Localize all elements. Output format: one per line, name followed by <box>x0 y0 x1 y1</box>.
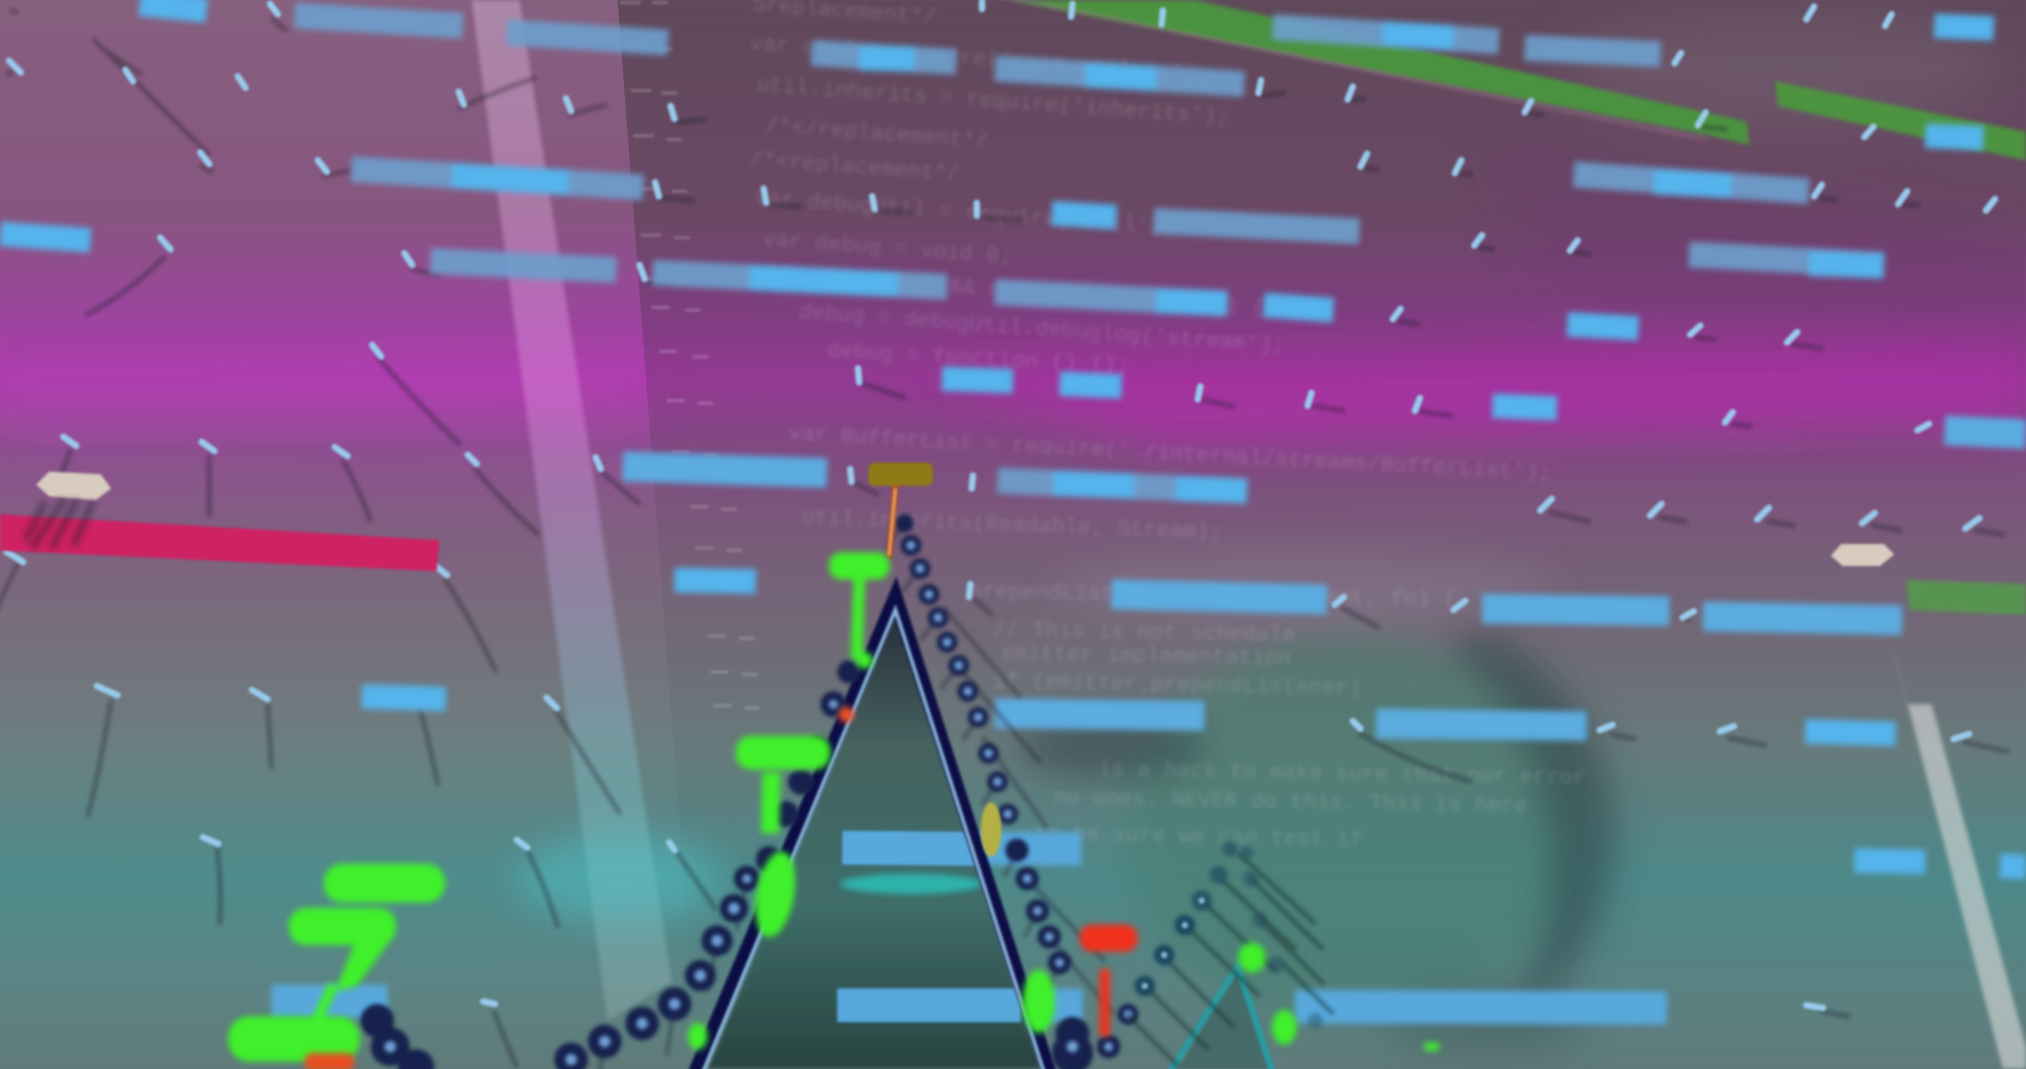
code text: is a hack to make sure that our error <box>1098 757 1586 791</box>
red dot <box>839 707 854 722</box>
code text: if (debugUtil && debugUtil.debuglog) { <box>764 261 1266 321</box>
marker shadows <box>26 499 93 548</box>
main triangle <box>695 597 1049 1069</box>
red stem <box>1101 969 1109 1036</box>
navy beads <box>360 514 1138 1069</box>
code text: if (emitter.prependListener) <box>992 669 1361 701</box>
lower bars <box>271 848 1667 1008</box>
small triangle fill <box>1178 967 1273 1069</box>
teal bead shadows <box>1127 853 1333 1066</box>
left green marker <box>229 864 444 1061</box>
redraw bars on triangle <box>837 848 1021 1005</box>
code text: to be sure we can test if <box>1034 822 1363 853</box>
solid bars <box>623 430 2026 726</box>
gold marker <box>868 463 933 558</box>
bead shadows <box>600 523 1114 1069</box>
vertical light beam <box>472 0 672 1021</box>
code text: var util = require('core-util-is'); <box>749 31 1211 88</box>
small green dots <box>689 943 1439 1051</box>
code text: debug = debugUtil.debuglog('stream'); <box>798 300 1286 359</box>
green strips <box>995 0 2026 615</box>
teal beads <box>1134 841 1323 1029</box>
small triangle outline <box>1169 967 1273 1069</box>
bead highlights <box>384 541 1133 1065</box>
code text: /*<replacement*/ <box>749 147 961 187</box>
small teal triangle <box>1169 967 1273 1069</box>
code text <box>749 0 1586 853</box>
gold cap <box>868 463 933 486</box>
green markers <box>229 553 1439 1061</box>
code text: emitter implementation <box>1001 641 1291 671</box>
code text: var debug = void 0; <box>762 228 1013 270</box>
code text: util.inherits(Readable, Stream); <box>801 505 1223 545</box>
pink bar <box>0 514 439 571</box>
dim bars <box>295 16 1884 491</box>
stem highlight <box>889 488 895 556</box>
triangle outline <box>695 597 1049 1069</box>
cyan glow <box>517 835 724 923</box>
inner cyan glow <box>840 873 982 894</box>
code text: /*</replacement*/ <box>764 114 990 154</box>
line-number dashes <box>620 3 760 708</box>
code panel shade <box>618 0 2026 1069</box>
code text: var debugUtil = require('util'); <box>754 186 1176 241</box>
magenta glow band <box>0 6 2026 446</box>
code text: // This is not schedule <box>992 618 1296 648</box>
beige markers <box>36 472 1894 566</box>
code text: var BufferList = require('./internal/streams/BufferList'); <box>788 421 1552 486</box>
code text: no ones. NEVER do this. This is here <box>1053 786 1528 819</box>
top green marker <box>830 553 889 668</box>
code text: debug = function () {}; <box>827 339 1130 379</box>
middle green marker <box>736 737 830 939</box>
teal bead highlights <box>1142 897 1205 989</box>
gold stem <box>889 486 895 558</box>
red base <box>305 1053 354 1069</box>
circular dark shape <box>1014 552 1615 1060</box>
code text: util.inherits = require('inherits'); <box>755 72 1230 131</box>
red markers <box>305 707 1137 1069</box>
yellow marker <box>981 802 1001 857</box>
triangle fill <box>708 607 1041 1069</box>
right white beam <box>1889 633 2026 1069</box>
triangle highlight <box>703 610 1044 1069</box>
code text: prependListener(emitter, event, fn) { <box>969 579 1457 612</box>
red cap <box>1080 925 1137 951</box>
